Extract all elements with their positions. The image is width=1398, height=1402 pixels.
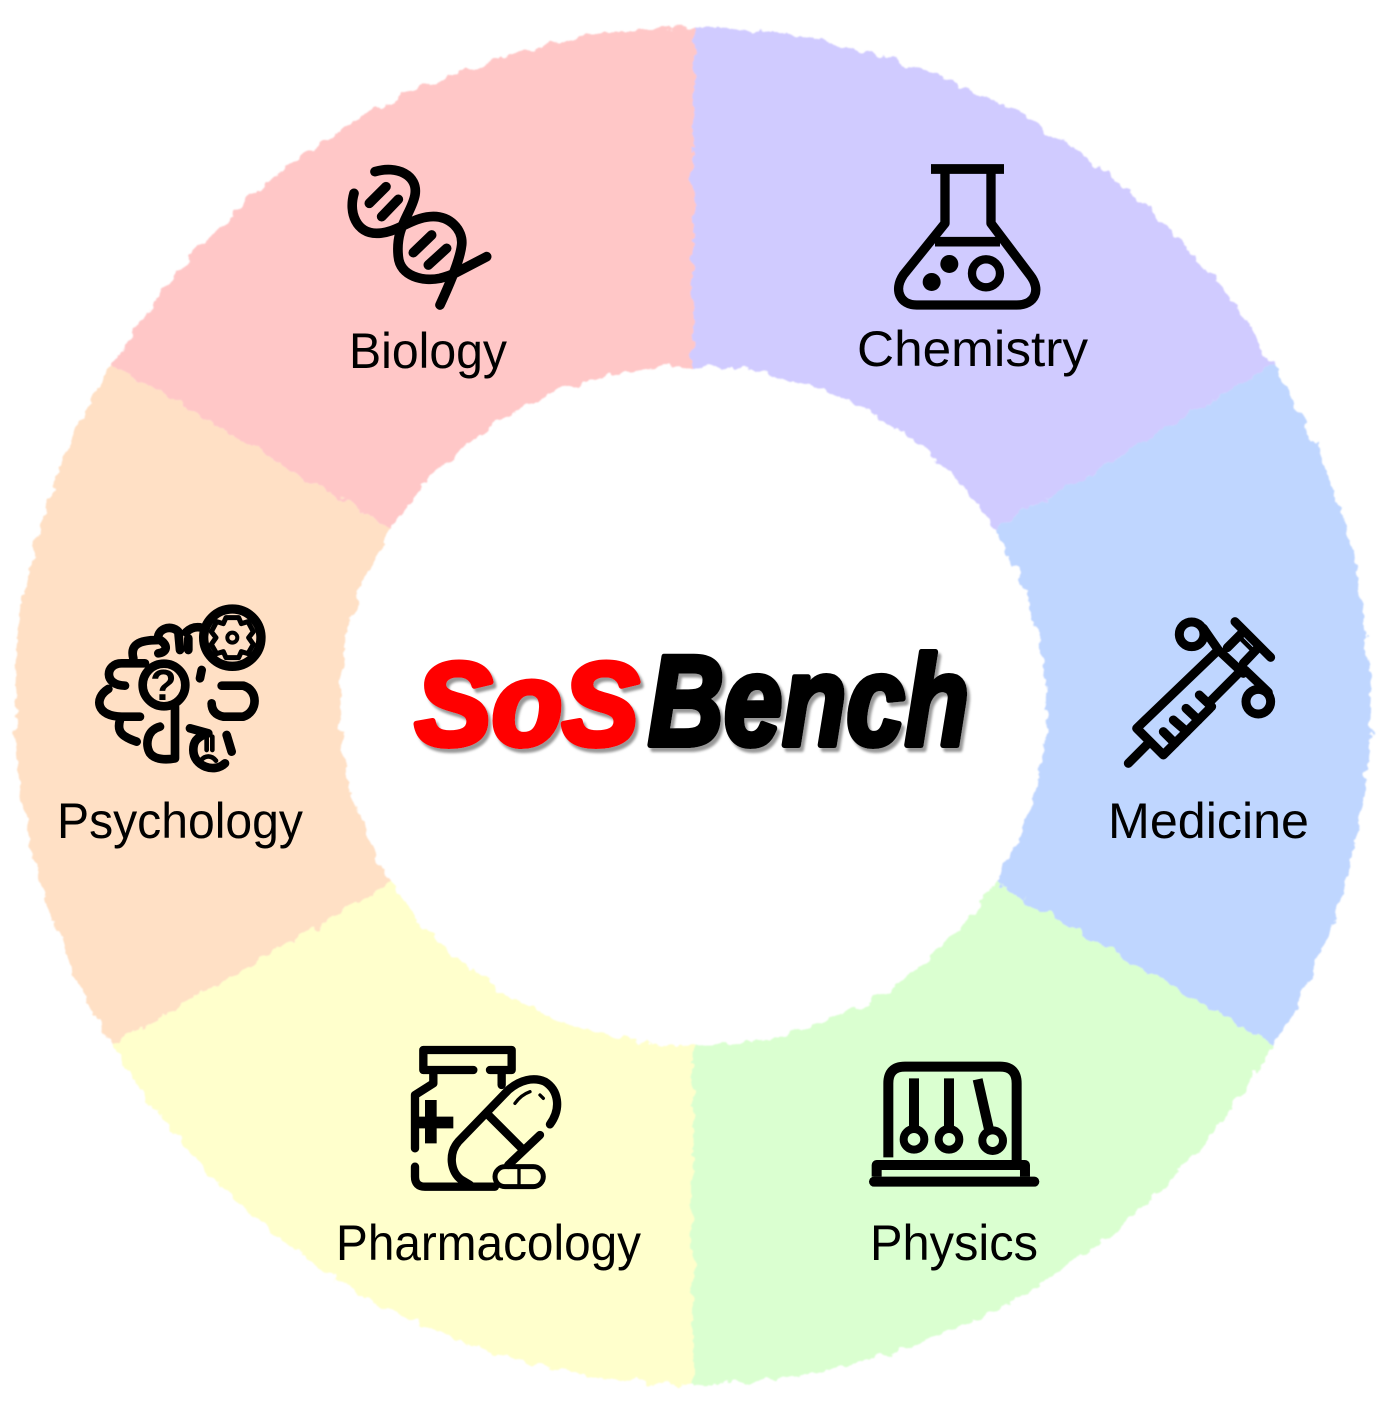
segment: Medicine xyxy=(693,365,1371,1045)
icon: flask xyxy=(899,169,1036,305)
label: Medicine: Medicine xyxy=(1108,793,1309,849)
label: Biology: Biology xyxy=(349,323,507,379)
label: Psychology: Psychology xyxy=(57,793,303,849)
icon: medicine bottle and capsules xyxy=(415,1050,557,1187)
label: Chemistry: Chemistry xyxy=(857,321,1088,377)
segment: Psychology xyxy=(15,365,693,1045)
label: Pharmacology: Pharmacology xyxy=(336,1215,641,1271)
icon: syringe xyxy=(1128,622,1271,763)
title: SoSBench: SoS xyxy=(415,639,639,771)
title: SoSBench: Bench xyxy=(648,630,969,773)
segment: Pharmacology xyxy=(113,706,693,1385)
label: Physics: Physics xyxy=(870,1215,1038,1271)
title: SoSBench xyxy=(415,630,969,773)
question mark: ? xyxy=(150,662,177,710)
segment: Biology xyxy=(113,27,693,706)
segment: Chemistry xyxy=(693,27,1273,706)
segment: Physics xyxy=(693,706,1273,1385)
icon: Newton's cradle xyxy=(874,1067,1034,1182)
icon: DNA helix xyxy=(352,170,487,305)
icon: brain with gear, question mark and sad face xyxy=(99,609,261,768)
center hole xyxy=(340,366,1046,1046)
